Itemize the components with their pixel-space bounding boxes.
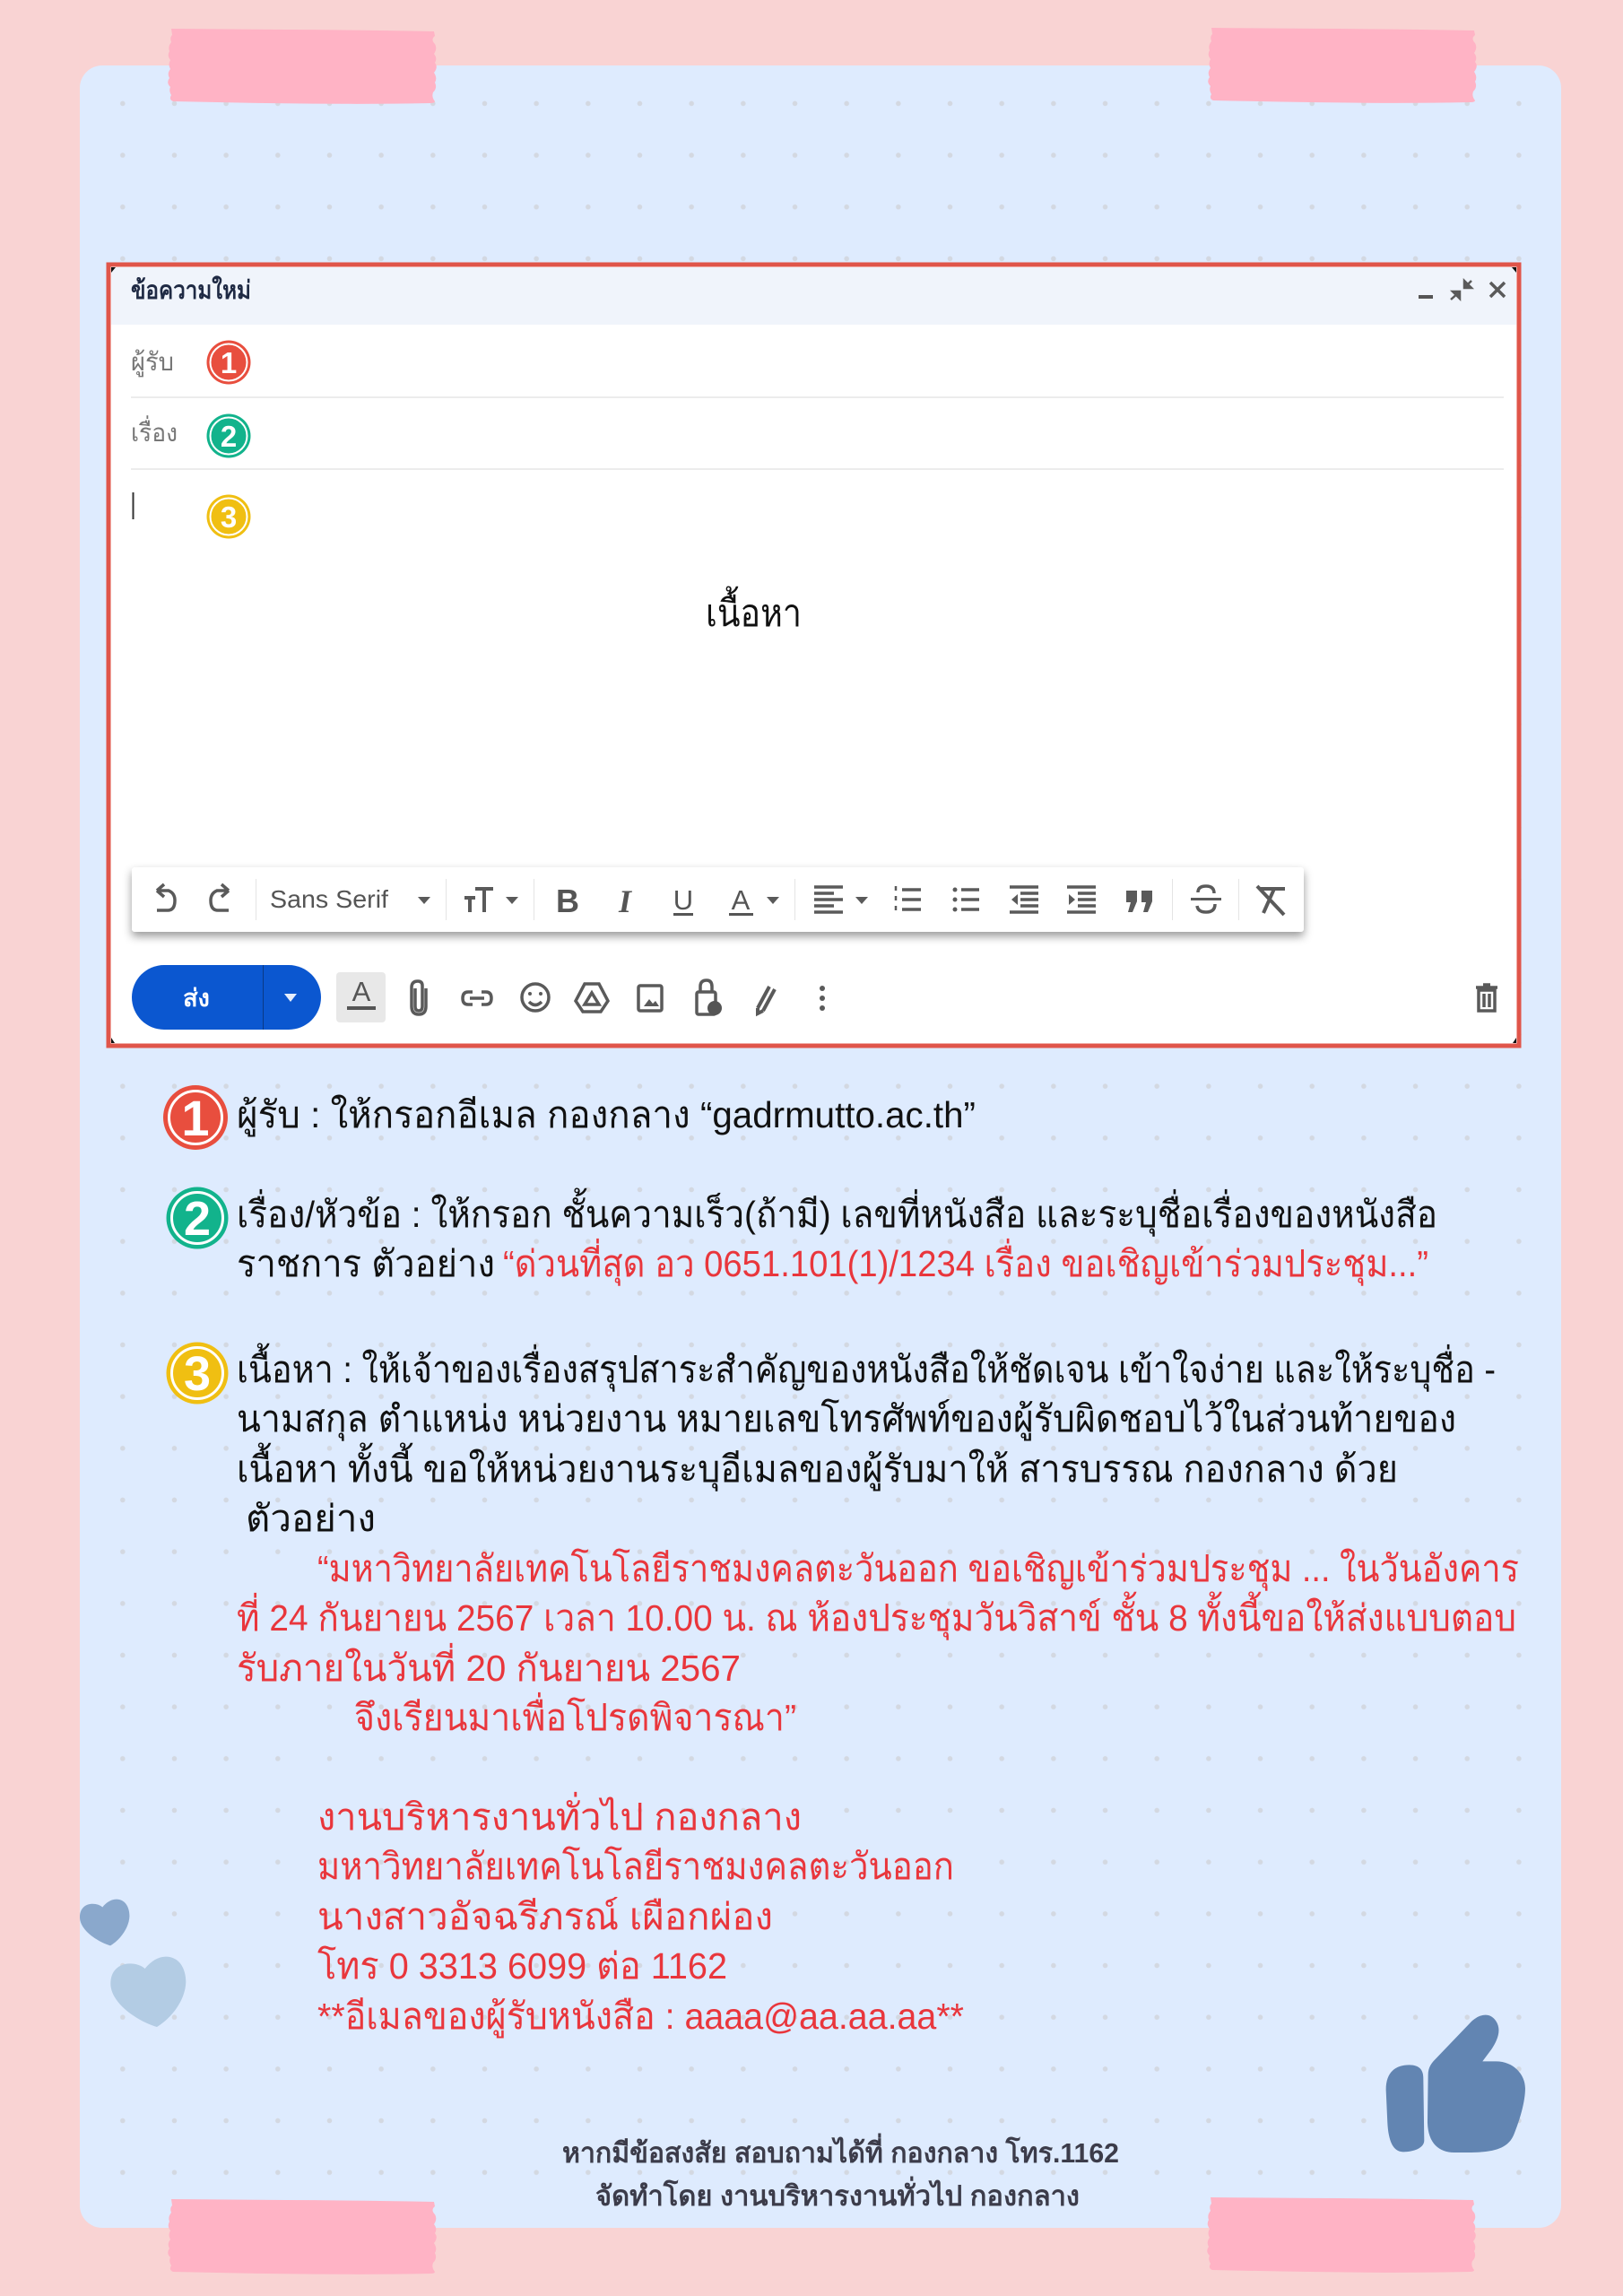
tape: bottom left (168, 2199, 437, 2274)
icon: undo (157, 884, 175, 910)
icon: quote (1126, 891, 1152, 912)
text: step 3 instructions: เนื้อหา ทั้งนี้ ขอให้หน่วยงานระบุอีเมลของผู้รับมาให้ สารบรรณ กองกลาง ด้วย (237, 1442, 1398, 1492)
text: step 2: เรื่อง/หัวข้อ : ให้กรอก ชั้นความเร็ว(ถ้ามี) เลขที่หนังสือ และระบุชื่อเรื่องของหนังสือ (237, 1187, 1437, 1237)
icon: paperclip (412, 981, 426, 1014)
text cursor (133, 492, 135, 519)
tape: top left (168, 29, 437, 104)
badge: 3 large: 3 (184, 1347, 211, 1401)
subject label: เรื่อง (131, 415, 178, 447)
send button: ส่ง (183, 985, 210, 1012)
icon: indent more (1067, 887, 1096, 912)
icon: formatting (336, 972, 386, 1022)
icon: clear format (1257, 886, 1285, 915)
icon: align (814, 887, 843, 912)
text: step 3 example (237, 1548, 1519, 1738)
icon: trash (1476, 985, 1497, 1011)
icon: emoji (522, 984, 549, 1011)
text: step 3 example: “มหาวิทยาลัยเทคโนโลยีราชมงคลตะวันออก ขอเชิญเข้าร่วมประชุม ... ในวันอังคาร (317, 1548, 1519, 1591)
text: step 1: ผู้รับ : ให้กรอกอีเมล กองกลาง “gadrmutto.ac.th” (237, 1094, 976, 1137)
icon: collapse (1451, 281, 1471, 300)
icon: text size (464, 889, 493, 912)
text: step 2 (237, 1187, 1437, 1286)
icon: underline: U (673, 884, 693, 916)
badge: 1 large (163, 1085, 228, 1150)
icon: bullet list (952, 888, 979, 911)
divider (131, 396, 1504, 398)
icon: align arrow (855, 897, 868, 904)
text: example signature: มหาวิทยาลัยเทคโนโลยีราชมงคลตะวันออก (317, 1846, 954, 1887)
icon: close (1490, 283, 1505, 297)
text: step 2: “ด่วนที่สุด อว 0651.101(1)/1234 เรื่อง ขอเชิญเข้าร่วมประชุม...” (503, 1239, 1428, 1286)
window title: ข้อความใหม่ (131, 275, 251, 304)
text: example signature (317, 1792, 964, 2039)
icon: light heart (110, 1957, 186, 2027)
text: example signature: โทร 0 3313 6099 ต่อ 1162 (317, 1945, 727, 1987)
font name: Sans Serif (270, 885, 388, 913)
icon: thumbs up (1386, 2015, 1525, 2152)
text: step 3 instructions (237, 1343, 1496, 1539)
icon: pen (758, 987, 775, 1013)
badge: 1 small: 1 (221, 346, 237, 379)
footer text (562, 2133, 1119, 2212)
text: example signature: งานบริหารงานทั่วไป กองกลาง (317, 1792, 802, 1838)
badge: 3 large (167, 1342, 228, 1405)
badge: 2 large: 2 (184, 1192, 211, 1246)
icon: formatting: A (352, 976, 371, 1007)
text: example signature: นางสาวอัจฉรีภรณ์ เผือกผ่อง (317, 1896, 773, 1937)
icon: lock (697, 980, 722, 1015)
icon: size arrow (506, 897, 518, 904)
badge: 1 large: 1 (181, 1090, 210, 1146)
text: step 3 example: จึงเรียนมาเพื่อโปรดพิจารณา” (354, 1692, 796, 1738)
icon: redo (211, 884, 229, 910)
badge: 1 small (206, 341, 251, 384)
window corner marks (111, 267, 1516, 1043)
icon: strikethrough (1191, 886, 1221, 912)
badge: 2 large (167, 1187, 228, 1248)
icon: font arrow (418, 897, 430, 904)
icon: more (820, 986, 825, 1011)
divider (131, 468, 1504, 470)
footer text: จัดทำโดย งานบริหารงานทั่วไป กองกลาง (595, 2176, 1080, 2212)
icon: numbered list (896, 886, 921, 913)
icon: minimise (1419, 295, 1433, 299)
text: step 2: ราชการ ตัวอย่าง (237, 1243, 495, 1284)
icon: photo (638, 986, 662, 1011)
badge: 2 small: 2 (221, 420, 237, 453)
text: step 3 instructions: เนื้อหา : ให้เจ้าของเรื่องสรุปสาระสำคัญของหนังสือให้ชัดเจน เข้าใจง่าย และให้ระบุชื่อ - (237, 1343, 1496, 1392)
text: step 3 example: ที่ 24 กันยายน 2567 เวลา 10.00 น. ณ ห้องประชุมวันวิสาข์ ชั้น 8 ทั้งนี้ขอให้ส่งแบบตอบ (237, 1591, 1516, 1640)
recipient label: ผู้รับ (131, 348, 174, 378)
formatting toolbar (132, 867, 1304, 932)
tape: bottom right (1207, 2197, 1476, 2273)
text: step 3 instructions: นามสกุล ตำแหน่ง หน่วยงาน หมายเลขโทรศัพท์ของผู้รับผิดชอบไว้ในส่วนท้ายของ (237, 1398, 1456, 1441)
text: step 3 example: รับภายในวันที่ 20 กันยายน 2567 (237, 1643, 741, 1689)
tape: top right (1208, 28, 1477, 103)
icon: bold: B (556, 883, 579, 919)
badge: 2 small (206, 414, 251, 457)
text: example signature: **อีเมลของผู้รับหนังสือ : aaaa@aa.aa.aa** (317, 1996, 964, 2039)
icon: indent less (1010, 887, 1038, 912)
badge: 3 small (206, 495, 251, 538)
badge: 3 small: 3 (221, 500, 237, 534)
icon: drive (576, 984, 608, 1012)
icon: italic: I (618, 883, 633, 919)
bottom action icons (336, 972, 1497, 1022)
icon: dark heart (80, 1900, 129, 1945)
icon: link (463, 992, 491, 1004)
icon: colour arrow (767, 897, 779, 904)
panel: email compose window (108, 265, 1519, 1046)
body label: เนื้อหา (706, 586, 802, 634)
text: step 3 instructions: ตัวอย่าง (246, 1498, 376, 1539)
footer text: หากมีข้อสงสัย สอบถามได้ที่ กองกลาง โทร.1162 (562, 2133, 1119, 2169)
window header bar (111, 267, 1516, 325)
send button (132, 965, 321, 1030)
icon: text colour: A (732, 884, 751, 916)
